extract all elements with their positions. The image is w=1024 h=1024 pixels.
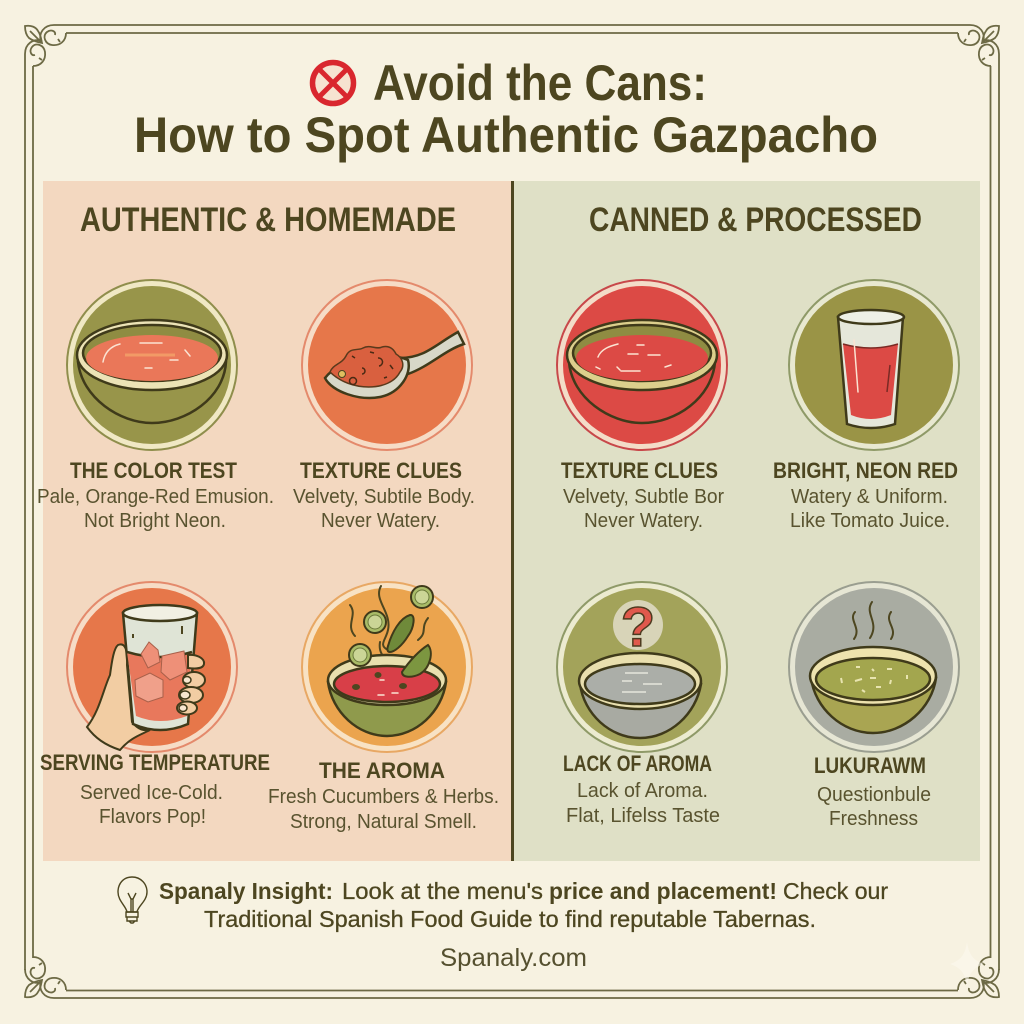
heading: authentic: AUTHENTIC & HOMEMADE — [80, 201, 456, 239]
label: bright neon red: Like Tomato Juice. — [790, 510, 950, 532]
label: serving temperature: SERVING TEMPERATURE — [40, 750, 270, 775]
label: lack of aroma: Lack of Aroma. — [577, 780, 708, 802]
icon: red crossed circle — [312, 62, 354, 104]
label: the aroma — [268, 758, 499, 833]
card: serving temperature — [40, 582, 270, 828]
card: bright neon red — [773, 280, 959, 532]
icon: glass of tomato juice — [789, 280, 959, 450]
title line 1: Avoid the Cans: — [373, 55, 707, 111]
icon: grey bowl with question mark: ? — [621, 595, 655, 658]
label: lack of aroma: Flat, Lifelss Taste — [566, 805, 720, 827]
label: lack of aroma — [563, 751, 720, 827]
heading: canned: CANNED & PROCESSED — [589, 201, 922, 239]
card: canned texture clues — [557, 280, 727, 532]
label: the aroma: THE AROMA — [319, 758, 445, 783]
footer insight — [118, 877, 888, 972]
icon: hand holding iced glass — [67, 582, 237, 752]
card: lukewarm — [789, 582, 959, 830]
insight text: Look at the menu's — [342, 878, 543, 904]
sparkle watermark — [950, 942, 984, 986]
label: canned texture clues — [561, 458, 724, 532]
brand url: Spanaly.com — [440, 944, 587, 972]
insight text: price and placement! — [549, 878, 777, 904]
label: the aroma: Strong, Natural Smell. — [290, 811, 477, 833]
label: canned texture clues: Velvety, Subtle Bor — [563, 486, 724, 508]
label: canned texture clues: Never Watery. — [584, 510, 703, 532]
label: canned texture clues: TEXTURE CLUES — [561, 458, 718, 483]
label: the aroma: Fresh Cucumbers & Herbs. — [268, 786, 499, 808]
label: bright neon red: Watery & Uniform. — [791, 486, 948, 508]
icon: olive bowl with pale soup — [67, 280, 237, 450]
insight text: Check our — [783, 878, 888, 904]
panel: canned and processed — [511, 181, 980, 861]
icon: lukewarm steaming bowl — [789, 582, 959, 752]
insight text: Spanaly Insight: — [159, 878, 333, 904]
card: lack of aroma — [557, 582, 727, 827]
insight text: Traditional Spanish Food Guide to find reputable Tabernas. — [204, 906, 816, 932]
label: serving temperature: Flavors Pop! — [99, 806, 206, 828]
card: texture clues — [293, 280, 475, 532]
label: texture clues: Never Watery. — [321, 510, 440, 532]
title line 2: How to Spot Authentic Gazpacho — [134, 107, 878, 163]
icon: bowl with cucumbers and herbs — [302, 582, 472, 752]
icon: light bulb — [118, 877, 147, 923]
label: lukewarm: LUKURAWM — [814, 753, 926, 778]
card: the color test — [37, 280, 274, 532]
label: texture clues — [293, 458, 475, 532]
label: bright neon red: BRIGHT, NEON RED — [773, 458, 958, 483]
insight text — [159, 878, 888, 932]
label: lack of aroma: LACK OF AROMA — [563, 751, 712, 776]
label: bright neon red — [773, 458, 958, 532]
card: the aroma — [268, 582, 499, 833]
label: serving temperature: Served Ice-Cold. — [80, 782, 223, 804]
icon: red bowl with neon soup — [557, 280, 727, 450]
title — [134, 55, 878, 163]
label: texture clues: Velvety, Subtile Body. — [293, 486, 475, 508]
panel: authentic and homemade — [37, 181, 512, 861]
label: serving temperature — [40, 750, 270, 828]
label: lukewarm: Questionbule — [817, 784, 931, 806]
icon: spoon with textured soup — [302, 280, 472, 450]
label: the color test: Not Bright Neon. — [84, 510, 226, 532]
label: lukewarm — [814, 753, 931, 830]
label: the color test — [37, 458, 274, 532]
icon: grey bowl with question mark — [557, 582, 727, 752]
label: the color test: THE COLOR TEST — [70, 458, 237, 483]
label: the color test: Pale, Orange-Red Emusion. — [37, 486, 274, 508]
label: lukewarm: Freshness — [829, 808, 918, 830]
label: texture clues: TEXTURE CLUES — [300, 458, 462, 483]
